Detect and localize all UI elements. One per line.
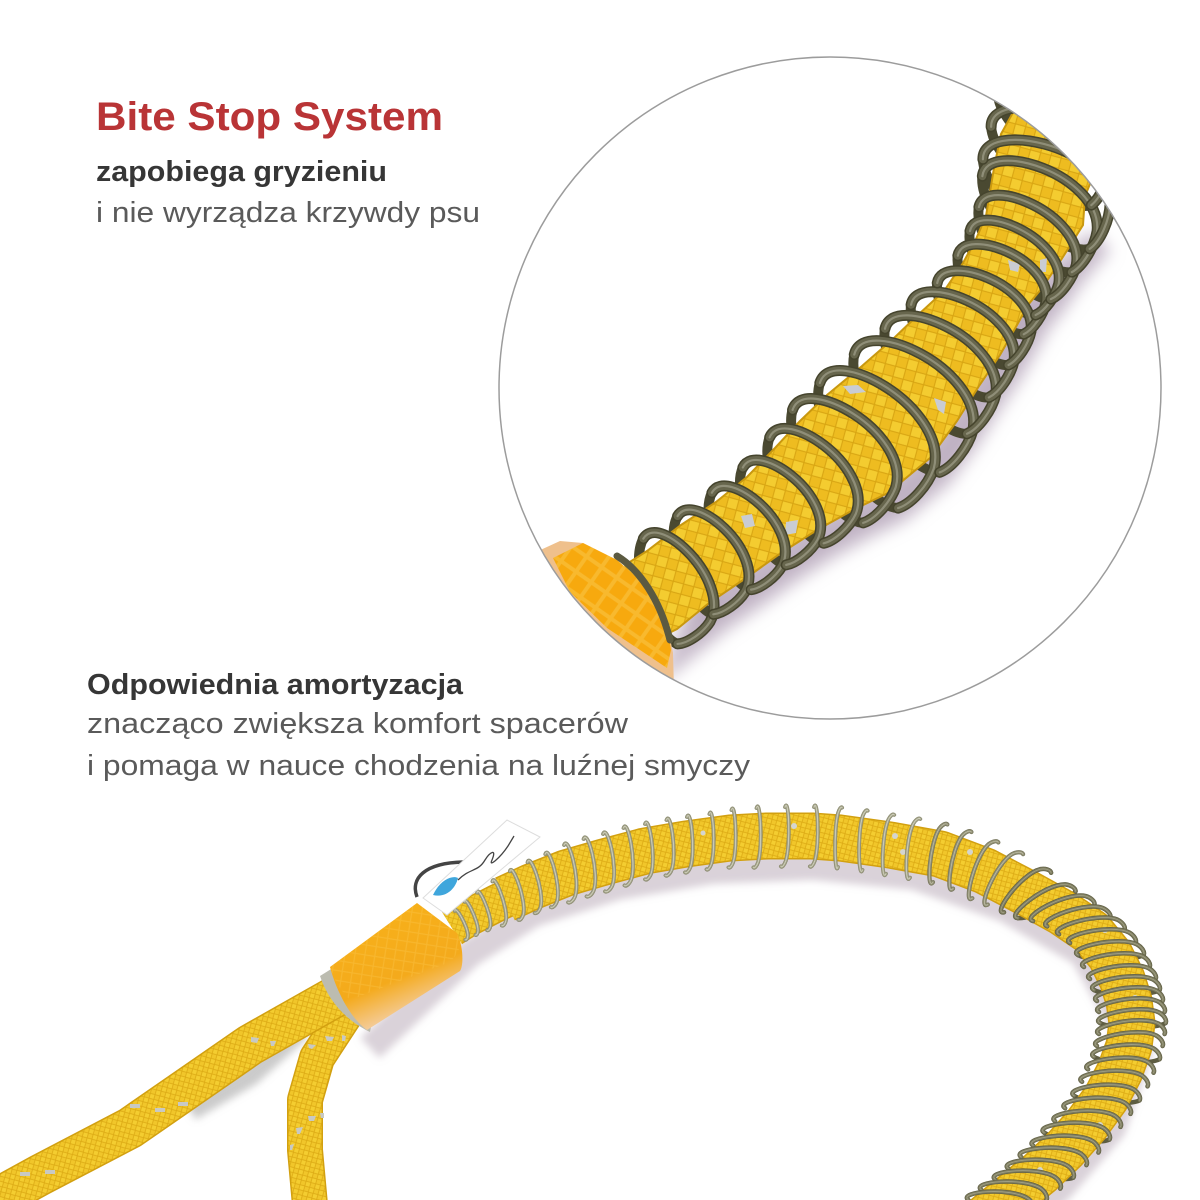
D-ring — [415, 862, 463, 897]
text block: amortization description — [87, 669, 751, 782]
orange reflective sleeve — [320, 903, 462, 1032]
rope shadow in gap — [190, 1030, 300, 1110]
circle outline — [499, 57, 1161, 719]
close-up rope — [625, 100, 1100, 640]
close-up shadow — [687, 241, 1100, 645]
coiled rope section — [452, 836, 1132, 1200]
stopper-side coil — [617, 556, 670, 640]
orange reflective stopper — [542, 541, 674, 679]
subheading: zapobiega gryzieniu: zapobiega gryzieniu — [96, 156, 387, 188]
title: Bite Stop System — [96, 95, 443, 139]
label tag — [423, 820, 540, 915]
tag signature scribble — [458, 836, 514, 880]
spring coils mid section — [924, 822, 1023, 906]
description line two: i pomaga w nauce chodzenia na luźnej smyczy — [87, 750, 751, 782]
lower leash with spring — [0, 805, 1166, 1200]
lower rope strands — [0, 993, 347, 1200]
reflective flecks — [741, 258, 1047, 535]
spring coils light section — [455, 805, 920, 940]
spring coils dark section — [967, 863, 1166, 1200]
subheading: odpowiednia amortyzacja: Odpowiednia amortyzacja — [87, 669, 464, 701]
leash shadow — [370, 866, 1138, 1200]
tag logo mark — [433, 877, 458, 896]
description line one: znacząco zwiększa komfort spacerów — [87, 708, 629, 740]
spring back wires — [1008, 891, 1166, 1182]
text block: bite stop description — [96, 156, 480, 229]
reflective dots on ropes — [20, 979, 346, 1176]
panel: circular close-up of spring — [499, 57, 1161, 719]
spring coils close-up — [642, 78, 1131, 645]
reflective dots on spring rope — [700, 823, 1138, 1173]
description line: i nie wyrządza krzywdy psu — [96, 197, 480, 229]
